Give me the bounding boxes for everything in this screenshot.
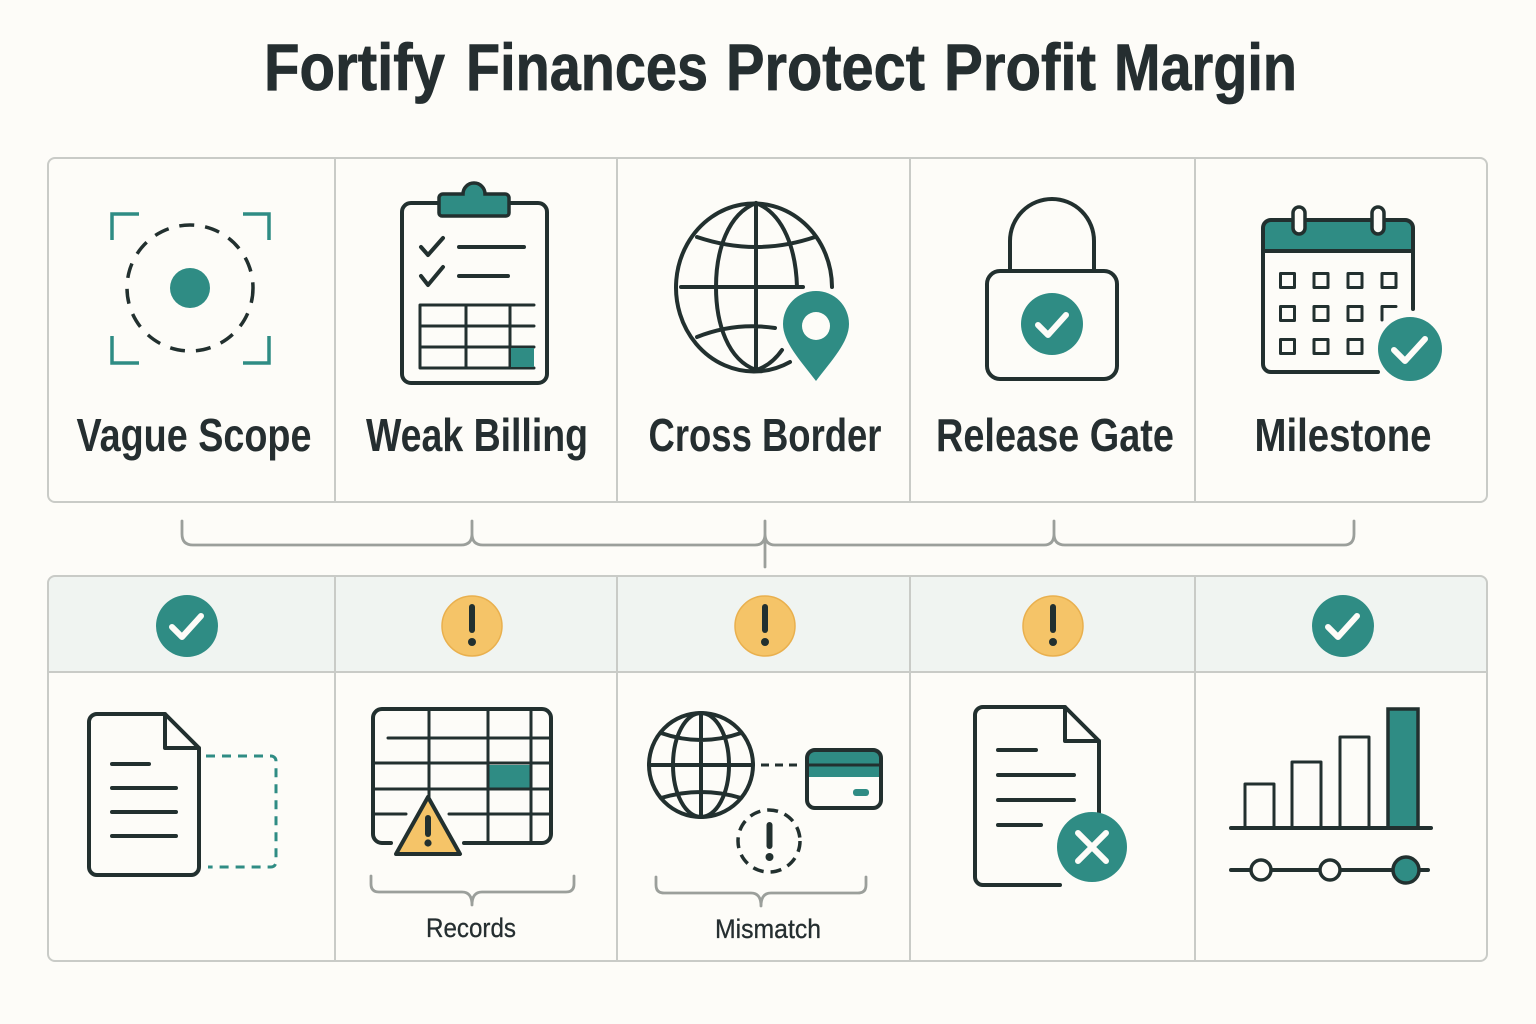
title: [264, 30, 1297, 104]
status: warning 3: [735, 596, 795, 656]
title: Finances: [466, 30, 708, 104]
icon: document with dashed extension: [89, 714, 276, 875]
icon: milestone calendar: [1263, 207, 1442, 381]
panel: bottom status table: [48, 576, 1487, 961]
label: Records: Records: [426, 913, 516, 943]
icon: cross border globe with pin: [676, 203, 849, 381]
status: check 1: [156, 595, 218, 657]
icon: weak billing clipboard: [402, 183, 547, 383]
icon: release gate padlock: [987, 199, 1117, 379]
label: Milestone: Milestone: [1254, 409, 1432, 461]
label: Cross Border: Cross Border: [648, 409, 882, 461]
title: Profit: [944, 30, 1096, 104]
label: Release Gate: Release Gate: [936, 409, 1174, 461]
status: check 5: [1312, 595, 1374, 657]
label: Weak Billing: Weak Billing: [366, 409, 588, 461]
status: warning 4: [1023, 596, 1083, 656]
icon: document with rejection: [975, 707, 1127, 885]
bracket: mismatch: [656, 877, 866, 906]
icon: vague scope target: [112, 214, 269, 363]
label: Vague Scope: Vague Scope: [76, 409, 312, 461]
status header band: [48, 576, 1487, 672]
bracket connector: [182, 521, 1354, 567]
title: Margin: [1114, 30, 1297, 104]
icon: globe, card and mismatch alert: [649, 713, 881, 872]
title: Protect: [726, 30, 925, 104]
panel: top concepts: [48, 158, 1487, 502]
status: warning 2: [442, 596, 502, 656]
title: Fortify: [264, 30, 445, 104]
icon: spreadsheet with warning: [373, 709, 551, 854]
bracket: records: [371, 876, 574, 905]
icon: bar chart and timeline: [1231, 709, 1431, 883]
label: Mismatch: Mismatch: [715, 914, 821, 944]
